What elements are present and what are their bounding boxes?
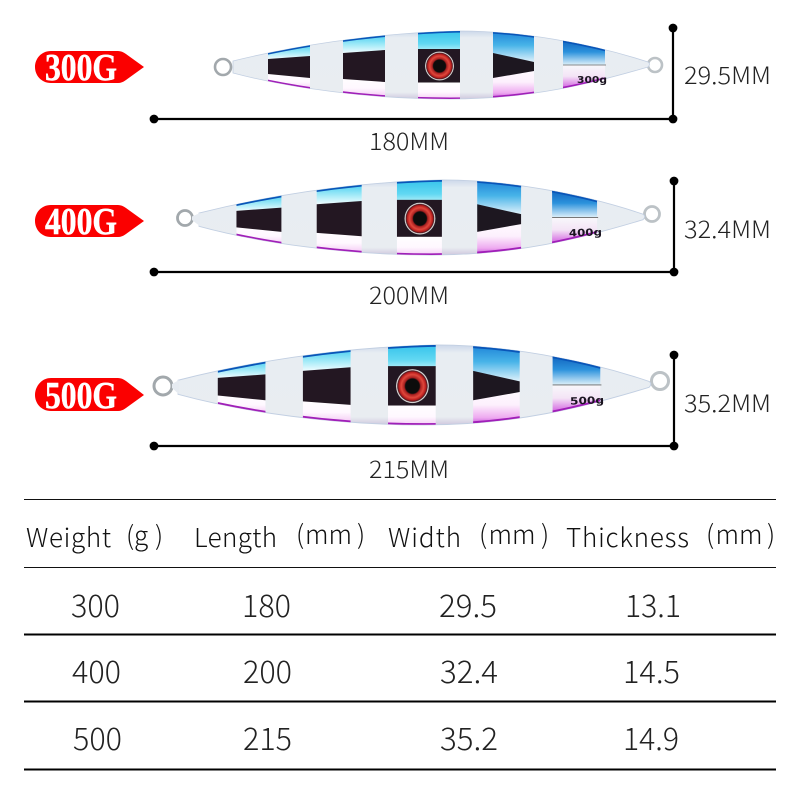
tag: 300G: 300G — [45, 47, 117, 89]
lure: 400g: 400g — [569, 227, 602, 240]
tag: 500G: 500G — [45, 375, 117, 417]
dimension: 180MM length — [150, 115, 673, 157]
table header row: g — [134, 516, 148, 553]
table header row: ( — [479, 515, 487, 552]
table header row: Length — [194, 518, 277, 555]
table header row — [26, 515, 775, 555]
table header row: ) — [767, 515, 775, 552]
dimension: 200MM length — [150, 268, 674, 311]
tag: 400G: 400G — [45, 201, 117, 243]
dimension: 215MM length: 215MM — [369, 450, 449, 485]
dimension: 35.2MM width: 35.2MM — [684, 384, 771, 419]
dimension: 35.2MM width — [670, 351, 771, 450]
dimension: 200MM length: 200MM — [369, 276, 449, 311]
dimension: 29.5MM width — [669, 24, 771, 123]
table row: 400: 400 — [72, 647, 121, 692]
table row: 500: 14.9 — [623, 714, 679, 759]
table row: 500: 35.2 — [440, 714, 498, 759]
table row: 300: 13.1 — [625, 581, 681, 626]
table row: 400: 200 — [243, 647, 292, 692]
table row: 300: 29.5 — [439, 581, 497, 626]
lure: 300g — [215, 29, 662, 100]
table row: 400 — [72, 647, 680, 692]
table row: 500: 215 — [243, 714, 292, 759]
table header row: ) — [357, 515, 365, 552]
table header row: mm — [305, 515, 352, 552]
table header row: mm — [716, 515, 763, 552]
table header row: ( — [126, 516, 134, 553]
dimension: 180MM length: 180MM — [369, 122, 449, 157]
lure: 500g: 500g — [570, 395, 604, 408]
table header row: Weight — [26, 518, 111, 555]
table header row: mm — [488, 515, 536, 552]
table header row: ) — [541, 515, 549, 552]
dimension: 215MM length — [150, 442, 674, 485]
table row: 400: 14.5 — [623, 647, 680, 692]
dimension: 32.4MM width — [670, 177, 771, 276]
table row: 300 — [71, 581, 681, 626]
table header row: Width — [388, 518, 461, 555]
table row: 400: 32.4 — [440, 647, 498, 692]
dimension: 32.4MM width: 32.4MM — [684, 210, 771, 245]
table row: 300: 180 — [242, 581, 291, 626]
table row: 300: 300 — [71, 581, 120, 626]
table row: 500 — [73, 714, 679, 759]
dimension: 29.5MM width: 29.5MM — [684, 56, 771, 91]
table: size specifications — [24, 500, 776, 770]
lure: 400g — [178, 178, 660, 256]
lure: 500g — [154, 343, 668, 426]
table header row: ) — [155, 516, 163, 553]
table header row: ( — [706, 515, 714, 552]
lure: 300g: 300g — [577, 75, 607, 86]
table header row: ( — [296, 515, 304, 552]
table row: 500: 500 — [73, 714, 122, 759]
table header row: Thickness — [566, 518, 689, 555]
